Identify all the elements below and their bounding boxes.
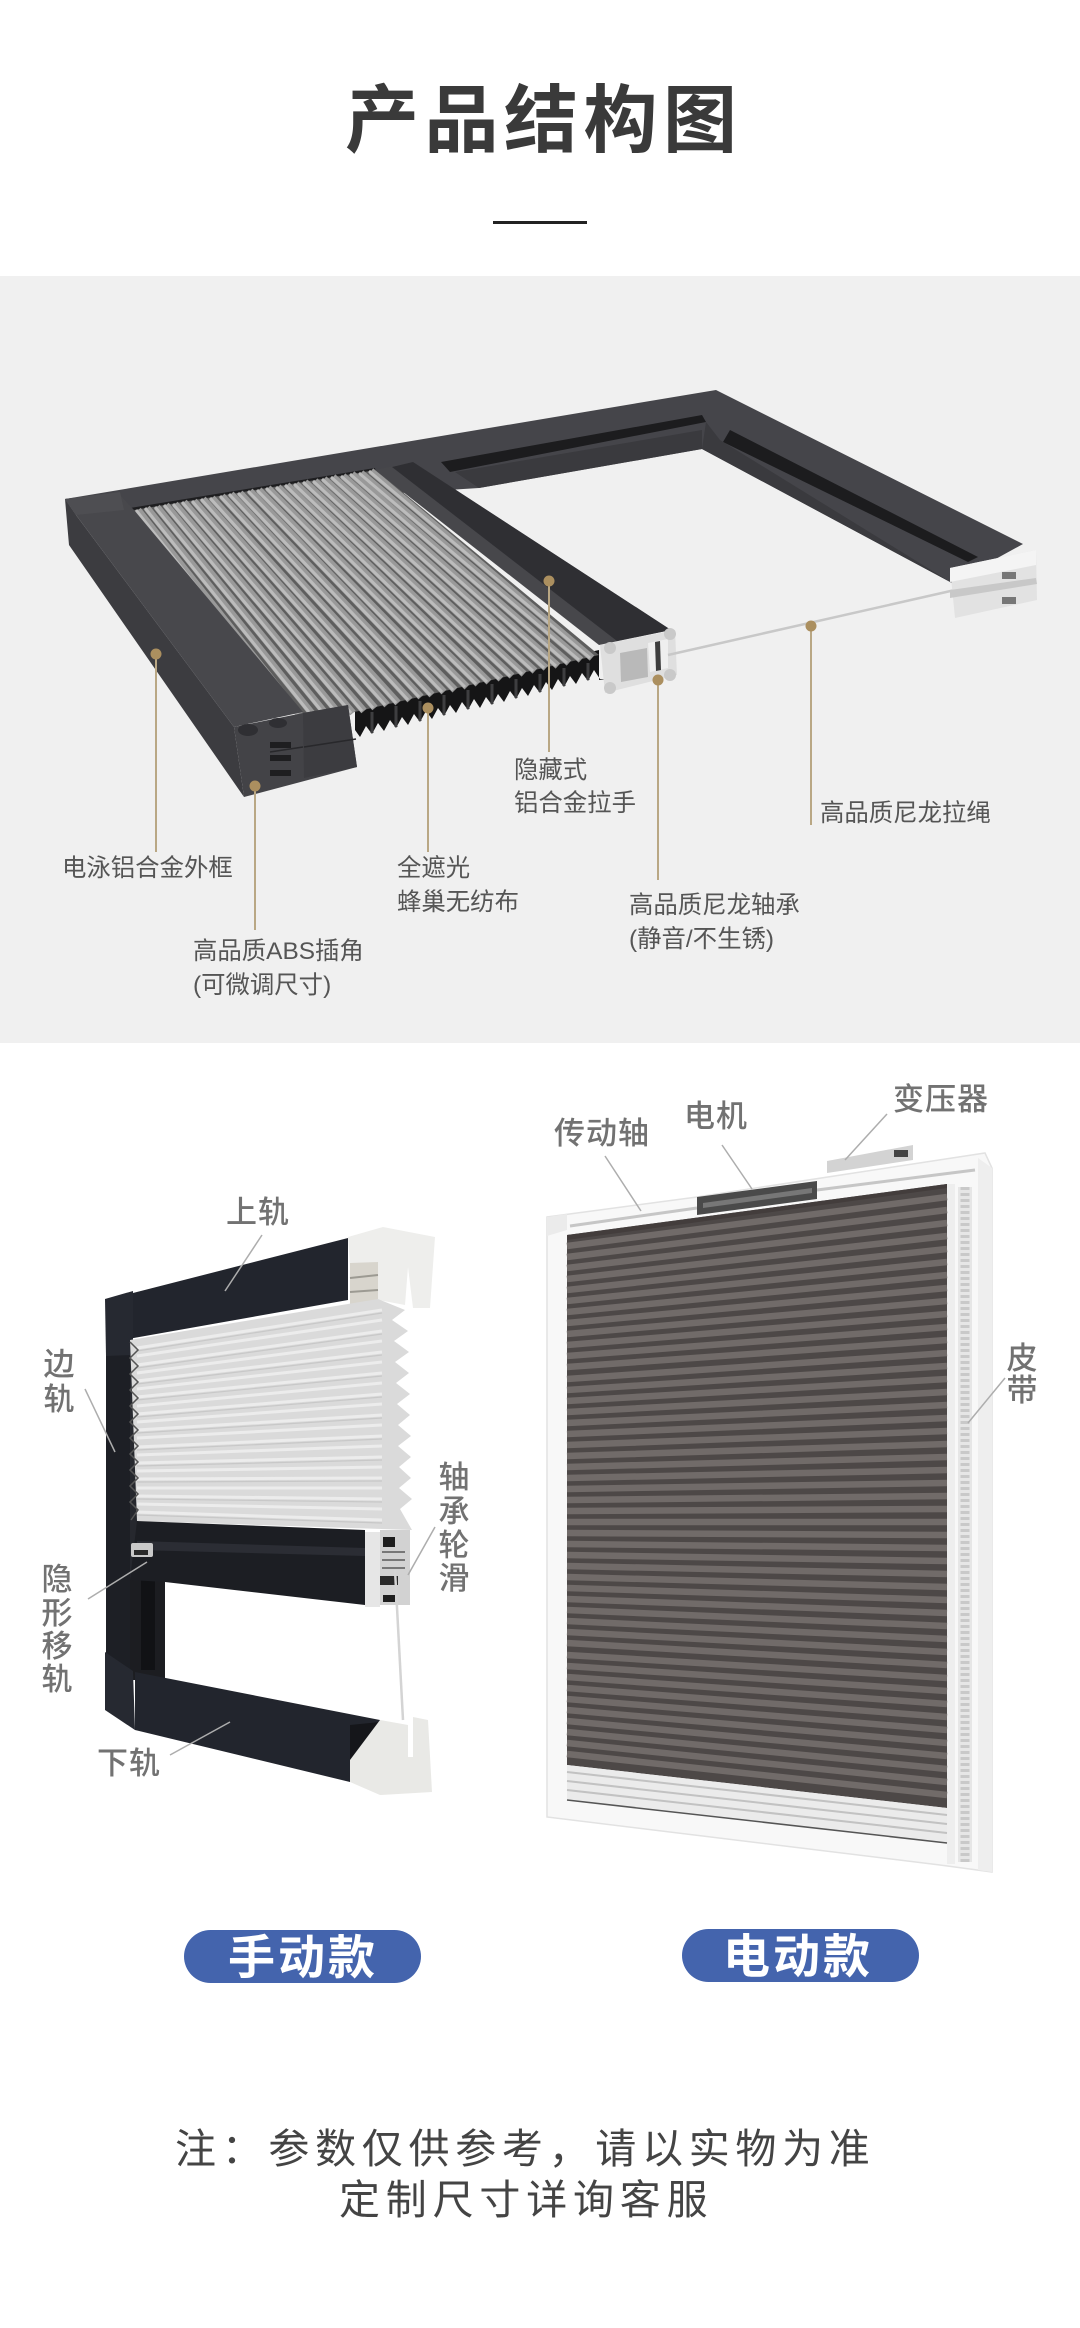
label: hidden moving rail: 移: [42, 1629, 72, 1664]
honeycomb pleated fabric: [134, 470, 599, 724]
label: fabric: [397, 855, 519, 916]
label: hidden moving rail: [42, 1562, 72, 1697]
label: ABS corner: 高品质ABS插角: [193, 938, 364, 965]
pull cord: [395, 1570, 403, 1720]
panel: electric model window: [547, 1082, 1038, 1872]
callout leader lines and dots: [150, 576, 816, 930]
note text: [175, 2126, 876, 2223]
ABS corner clip far end: [950, 550, 1037, 618]
label: bearing: [629, 892, 800, 953]
label: belt: [1006, 1341, 1038, 1408]
top rail: [105, 1238, 348, 1356]
label: belt: 皮: [1006, 1341, 1038, 1376]
dark cellular fabric: [567, 1184, 947, 1808]
label: belt: 带: [1006, 1373, 1038, 1408]
label: ABS corner: [193, 938, 364, 999]
bottom bar: [567, 1765, 947, 1843]
label: ABS corner: (可微调尺寸): [193, 972, 331, 999]
label: hidden moving rail: 形: [42, 1596, 72, 1631]
label: handle: 隐藏式: [514, 757, 587, 784]
label: bearing pulley: [438, 1460, 470, 1596]
transformer: [827, 1145, 913, 1173]
nylon bearing clip: [600, 628, 677, 694]
label: motor: 电机: [684, 1099, 748, 1134]
black front pleats: [355, 650, 606, 737]
label: bearing: (静音/不生锈): [629, 926, 774, 953]
panel: honeycomb blind structure diagram: [0, 276, 1080, 1043]
nylon pull cord: [668, 590, 955, 655]
label: bearing pulley: 轮: [438, 1528, 470, 1563]
motor: [697, 1181, 817, 1215]
white top corner clip: [348, 1227, 435, 1308]
label: transformer: 变压器: [893, 1082, 989, 1117]
badge: electric: 电动款: [723, 1930, 873, 1983]
movable middle rail: [130, 1521, 365, 1605]
panel: manual model window: [42, 1195, 470, 1795]
white outer frame: [547, 1153, 992, 1872]
label: bearing pulley: 轴: [438, 1460, 470, 1495]
electrophoresis aluminium outer frame, left rail: [65, 492, 357, 797]
callout lines: [605, 1114, 1005, 1423]
label: hidden moving rail: 隐: [42, 1562, 72, 1597]
label: fabric: 蜂巢无纺布: [397, 889, 519, 916]
label: bottom rail: 下轨: [97, 1746, 161, 1781]
callout lines: [85, 1235, 435, 1755]
note text: 注：参数仅供参考，请以实物为准: [175, 2126, 876, 2172]
label: side rail: [44, 1347, 74, 1417]
bearing pulley clip: [365, 1530, 410, 1607]
label: side rail: 轨: [44, 1382, 74, 1417]
label: handle: 铝合金拉手: [514, 790, 636, 817]
badge: electric: [682, 1929, 919, 1983]
label: fabric: 全遮光: [397, 855, 470, 882]
title: 产品结构图: [345, 79, 742, 162]
bottom rail: [105, 1652, 380, 1782]
hidden aluminium alloy handle rail: [375, 462, 671, 645]
label: bearing: 高品质尼龙轴承: [629, 892, 800, 919]
white bottom corner clip: [350, 1717, 432, 1795]
label: drive shaft: 传动轴: [554, 1116, 650, 1151]
pleated fabric, white: [130, 1299, 412, 1530]
label: bearing pulley: 承: [438, 1494, 470, 1529]
label: outer frame: 电泳铝合金外框: [62, 855, 233, 882]
label: cord: 高品质尼龙拉绳: [820, 800, 991, 827]
label: side rail: 边: [44, 1347, 74, 1382]
note text: 定制尺寸详询客服: [339, 2177, 713, 2223]
label: top rail: 上轨: [226, 1195, 290, 1230]
label: hidden moving rail: 轨: [42, 1662, 72, 1697]
drive belt: [960, 1187, 970, 1862]
label: handle: [514, 757, 636, 817]
badge: manual: 手动款: [228, 1931, 378, 1984]
label: bearing pulley: 滑: [438, 1561, 470, 1596]
left side rail and inner channel: [106, 1340, 165, 1680]
top and right frame rails: [65, 390, 1023, 583]
badge: manual: [184, 1930, 421, 1984]
